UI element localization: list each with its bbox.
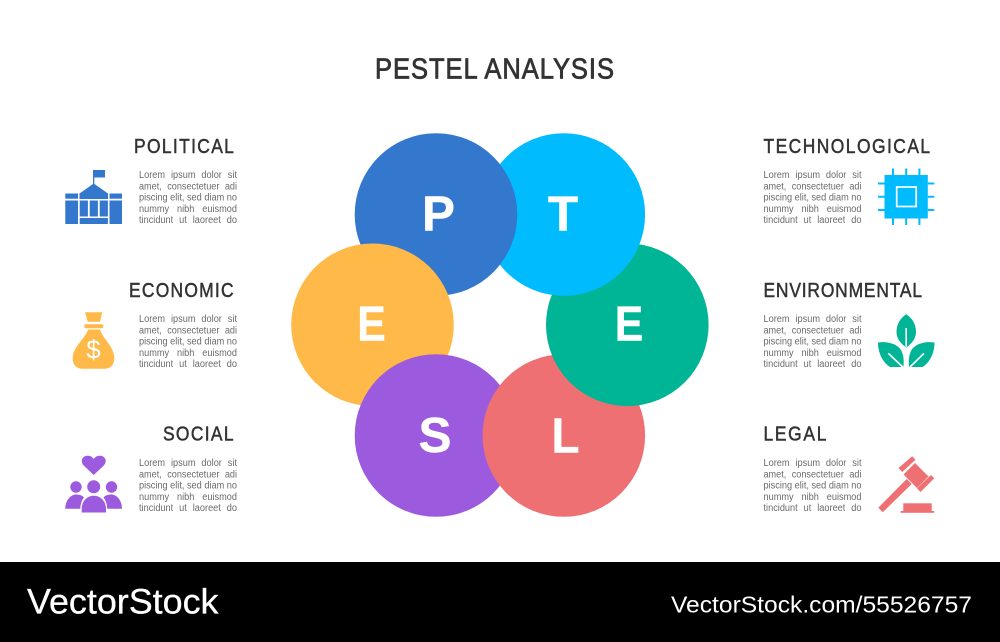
circle: environmental xyxy=(546,243,709,406)
icon: people with heart xyxy=(65,456,122,512)
panel: economic xyxy=(73,280,237,370)
text: technological: nummy nibh euismod xyxy=(764,204,862,215)
text: social: piscing elit, sed diam no xyxy=(139,481,237,492)
text: legal: tincidunt ut laoreet do xyxy=(764,503,862,514)
icon: money bag xyxy=(73,312,114,369)
text: social xyxy=(139,458,237,514)
panel: environmental xyxy=(764,280,934,370)
text: environmental: piscing elit, sed diam no xyxy=(764,337,862,348)
title: PESTEL ANALYSIS xyxy=(375,52,614,85)
icon: microchip xyxy=(878,168,934,225)
panel: social xyxy=(65,423,237,514)
text: political: tincidunt ut laoreet do xyxy=(139,215,237,226)
panel: legal xyxy=(764,423,934,514)
text: economic: tincidunt ut laoreet do xyxy=(139,359,237,370)
text: economic: nummy nibh euismod xyxy=(139,348,237,359)
text: legal: nummy nibh euismod xyxy=(764,492,862,503)
text: environmental: nummy nibh euismod xyxy=(764,348,862,359)
letter E right: E xyxy=(615,296,643,351)
circle: economic xyxy=(291,243,454,406)
panel: political xyxy=(65,136,237,226)
heading: social: SOCIAL xyxy=(163,423,234,446)
heading: technological: TECHNOLOGICAL xyxy=(764,136,930,159)
panel: technological xyxy=(764,136,934,226)
text: legal: amet, consectetuer adi xyxy=(764,469,862,480)
letter E left: E xyxy=(357,296,386,351)
circle: political xyxy=(355,133,517,296)
footer band xyxy=(0,562,1000,642)
circle: social xyxy=(355,354,517,517)
text: legal: piscing elit, sed diam no xyxy=(764,481,862,492)
letter S: S xyxy=(418,408,452,463)
text: political: Lorem ipsum dolor sit xyxy=(139,170,237,181)
text: technological: tincidunt ut laoreet do xyxy=(764,215,862,226)
icon: money bag: $ xyxy=(86,334,101,364)
text: political xyxy=(139,170,237,226)
text: environmental: tincidunt ut laoreet do xyxy=(764,359,862,370)
heading: political: POLITICAL xyxy=(134,136,234,159)
heading: legal: LEGAL xyxy=(764,423,826,446)
circle: political overlap xyxy=(460,136,518,292)
text: economic: Lorem ipsum dolor sit xyxy=(139,314,237,325)
text: political: piscing elit, sed diam no xyxy=(139,193,237,204)
text: social: amet, consectetuer adi xyxy=(139,469,237,480)
text: economic: piscing elit, sed diam no xyxy=(139,337,237,348)
text: legal xyxy=(764,458,862,514)
text: technological: Lorem ipsum dolor sit xyxy=(764,170,862,181)
text: environmental xyxy=(764,314,862,370)
icon: gavel xyxy=(878,456,934,513)
footer url text: VectorStock.com/55526757 xyxy=(671,592,972,618)
text: technological: piscing elit, sed diam no xyxy=(764,193,862,204)
heading: environmental: ENVIRONMENTAL xyxy=(764,280,922,302)
icon: government building xyxy=(65,170,122,224)
heading: economic: ECONOMIC xyxy=(129,280,234,302)
circle diagram xyxy=(291,133,709,517)
circle: technological xyxy=(482,133,645,296)
icon: leaves xyxy=(878,314,934,367)
letter P: P xyxy=(422,187,455,242)
text: economic: amet, consectetuer adi xyxy=(139,325,237,336)
text: technological xyxy=(764,170,862,226)
footer logo text: VectorStock xyxy=(27,582,219,621)
text: political: amet, consectetuer adi xyxy=(139,181,237,192)
text: environmental: Lorem ipsum dolor sit xyxy=(764,314,862,325)
text: social: nummy nibh euismod xyxy=(139,492,237,503)
text: legal: Lorem ipsum dolor sit xyxy=(764,458,862,469)
text: technological: amet, consectetuer adi xyxy=(764,181,862,192)
text: environmental: amet, consectetuer adi xyxy=(764,325,862,336)
text: social: Lorem ipsum dolor sit xyxy=(139,458,237,469)
text: political: nummy nibh euismod xyxy=(139,204,237,215)
circle: legal xyxy=(482,354,645,517)
letter T: T xyxy=(548,187,578,242)
text: social: tincidunt ut laoreet do xyxy=(139,503,237,514)
text: economic xyxy=(139,314,237,370)
letter L: L xyxy=(552,408,580,464)
